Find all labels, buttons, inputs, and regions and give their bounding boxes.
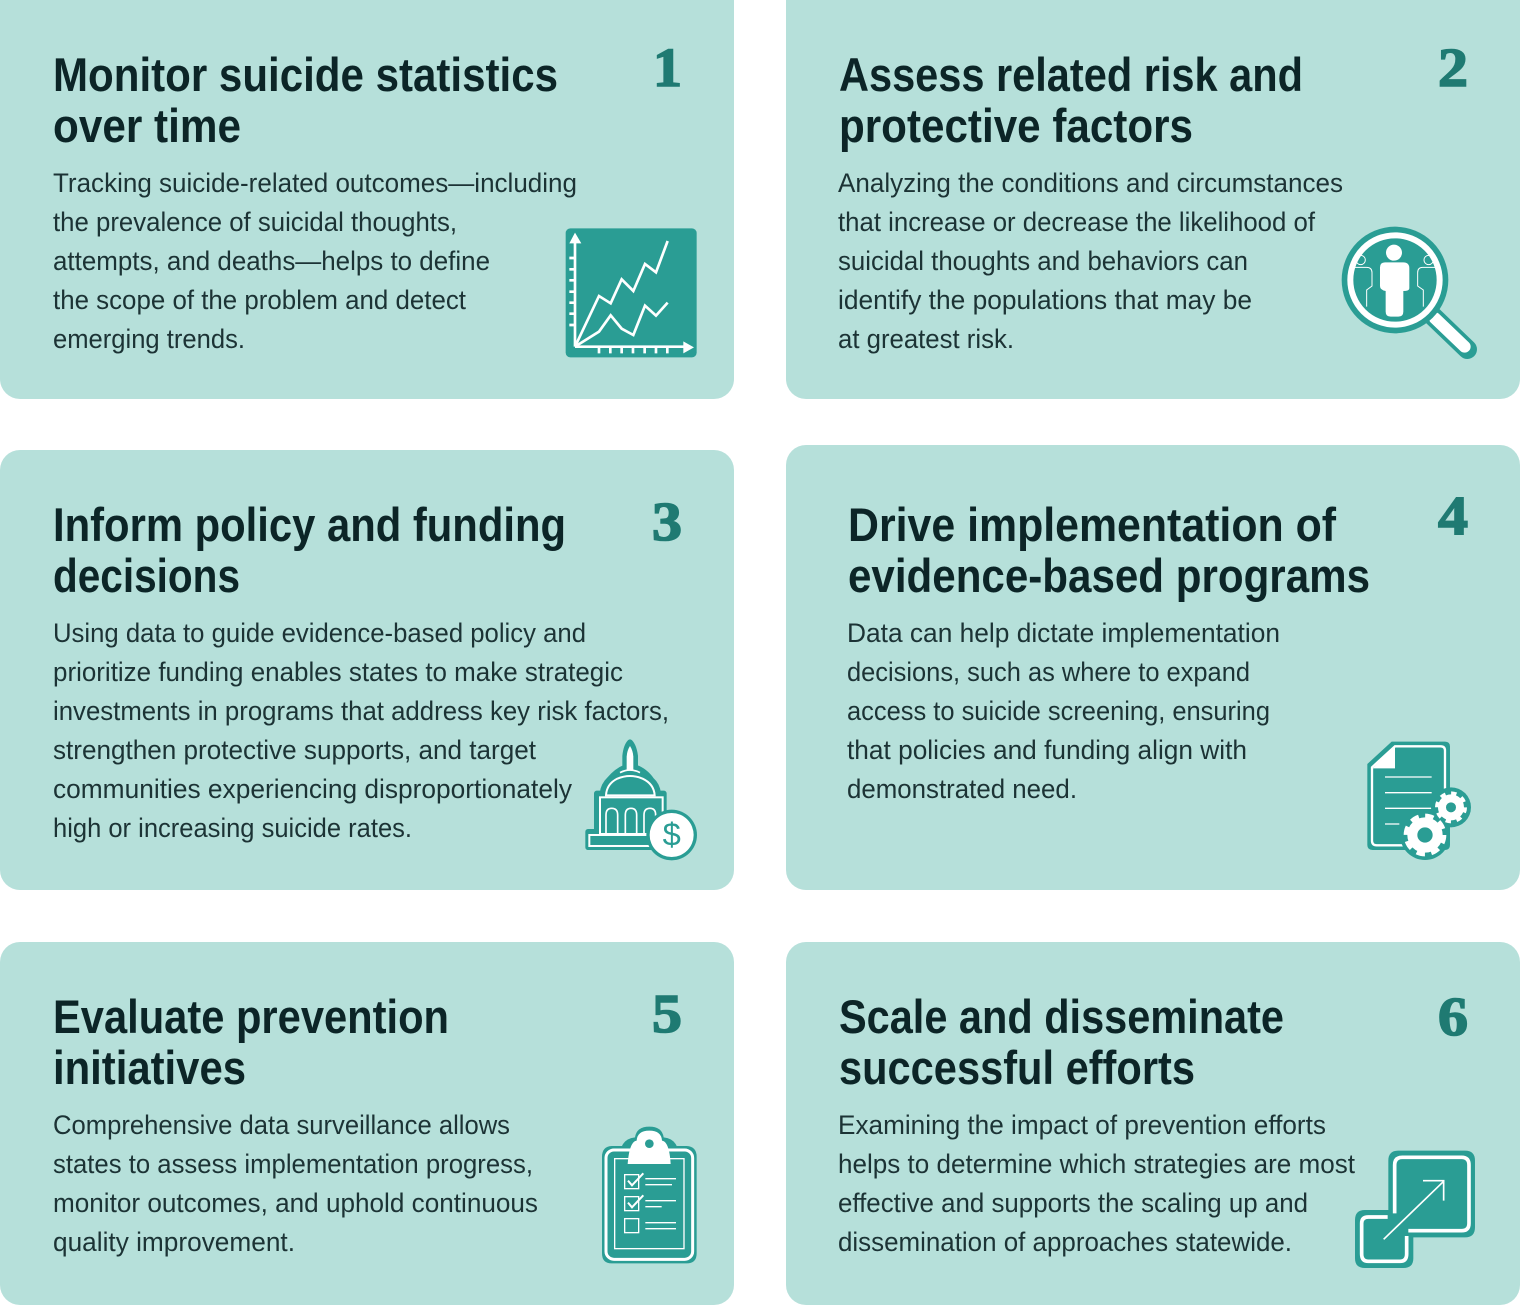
body text: drive: decisions, such as where to expand xyxy=(847,657,1250,687)
heading: scale and disseminate: successful efforts xyxy=(839,1041,1195,1094)
panel: evaluate prevention initiatives xyxy=(0,942,734,1305)
heading: scale and disseminate xyxy=(839,990,1284,1094)
number 3: 3 xyxy=(652,491,682,552)
icon: magnifying glass with people xyxy=(1342,227,1467,349)
icon: scale up arrow squares xyxy=(1355,1151,1475,1268)
heading: assess related risk xyxy=(839,48,1303,152)
heading: inform policy: decisions xyxy=(53,549,240,602)
body text: drive: demonstrated need. xyxy=(847,774,1077,804)
body text: inform: high or increasing suicide rates. xyxy=(53,813,412,843)
body text: drive: access to suicide screening, ensuring xyxy=(847,696,1270,726)
heading: scale and disseminate: Scale and disseminate xyxy=(839,990,1284,1043)
body text: evaluate: Comprehensive data surveillance allows xyxy=(53,1110,510,1140)
icon: capitol building with dollar coin xyxy=(588,742,697,860)
body text: scale: Examining the impact of prevention efforts xyxy=(838,1110,1326,1140)
panel: monitor suicide statistics xyxy=(0,0,734,399)
heading: inform policy xyxy=(53,498,566,602)
body text: monitor: Tracking suicide-related outcomes—including xyxy=(53,168,577,198)
heading: assess related risk: Assess related risk and xyxy=(839,48,1303,101)
number 1: 1 xyxy=(653,37,682,98)
body text: scale xyxy=(838,1110,1356,1257)
body text: evaluate: monitor outcomes, and uphold continuous xyxy=(53,1188,538,1218)
heading: monitor suicide statistics: Monitor suicide statistics xyxy=(53,48,558,101)
body text: monitor: the prevalence of suicidal thoughts, xyxy=(53,207,457,237)
body text: assess: Analyzing the conditions and circumstances xyxy=(838,168,1343,198)
body text: scale: helps to determine which strategies are most xyxy=(838,1149,1356,1179)
body text: monitor xyxy=(53,168,577,354)
body text: inform: communities experiencing disproportionately xyxy=(53,774,573,804)
panel: scale and disseminate xyxy=(786,942,1520,1305)
body text: assess: that increase or decrease the likelihood of xyxy=(838,207,1316,237)
body text: inform: prioritize funding enables states to make strategic xyxy=(53,657,623,687)
body text: drive: that policies and funding align with xyxy=(847,735,1247,765)
body text: evaluate: quality improvement. xyxy=(53,1227,295,1257)
heading: drive implementation: evidence-based programs xyxy=(848,549,1370,602)
body text: assess: at greatest risk. xyxy=(838,324,1014,354)
icon: line chart xyxy=(566,228,697,357)
body text: evaluate: states to assess implementation progress, xyxy=(53,1149,533,1179)
heading: evaluate prevention: Evaluate prevention xyxy=(53,990,449,1043)
body text: assess xyxy=(838,168,1343,354)
body text: assess: identify the populations that may be xyxy=(838,285,1252,315)
body text: inform: investments in programs that address key risk factors, xyxy=(53,696,669,726)
icon: clipboard checklist xyxy=(602,1127,697,1263)
body text: monitor: emerging trends. xyxy=(53,324,245,354)
body text: inform: Using data to guide evidence-based policy and xyxy=(53,618,586,648)
number 6: 6 xyxy=(1438,986,1468,1047)
heading: drive implementation: Drive implementation of xyxy=(848,498,1336,551)
body text: evaluate xyxy=(53,1110,538,1257)
body text: assess: suicidal thoughts and behaviors can xyxy=(838,246,1248,276)
number 4: 4 xyxy=(1438,485,1468,546)
body text: inform: strengthen protective supports, and target xyxy=(53,735,537,765)
panel: drive implementation xyxy=(786,445,1520,890)
number 2: 2 xyxy=(1438,37,1468,98)
body text: drive: Data can help dictate implementation xyxy=(847,618,1280,648)
heading: drive implementation xyxy=(848,498,1370,602)
panel: inform policy and funding xyxy=(0,450,734,890)
heading: evaluate prevention xyxy=(53,990,449,1094)
heading: monitor suicide statistics: over time xyxy=(53,99,241,152)
panel: assess risk and protective factors xyxy=(786,0,1520,399)
heading: monitor suicide statistics xyxy=(53,48,558,152)
body text: inform xyxy=(53,618,669,843)
body text: monitor: the scope of the problem and detect xyxy=(53,285,467,315)
body text: scale: dissemination of approaches statewide. xyxy=(838,1227,1292,1257)
body text: drive xyxy=(847,618,1280,804)
icon: document with gears xyxy=(1367,742,1471,860)
number 5: 5 xyxy=(652,983,682,1044)
heading: assess related risk: protective factors xyxy=(839,99,1193,152)
heading: inform policy: Inform policy and funding xyxy=(53,498,566,551)
heading: evaluate prevention: initiatives xyxy=(53,1041,246,1094)
body text: scale: effective and supports the scaling up and xyxy=(838,1188,1308,1218)
icon: capitol building with dollar coin: $ xyxy=(663,816,681,853)
body text: monitor: attempts, and deaths—helps to define xyxy=(53,246,490,276)
